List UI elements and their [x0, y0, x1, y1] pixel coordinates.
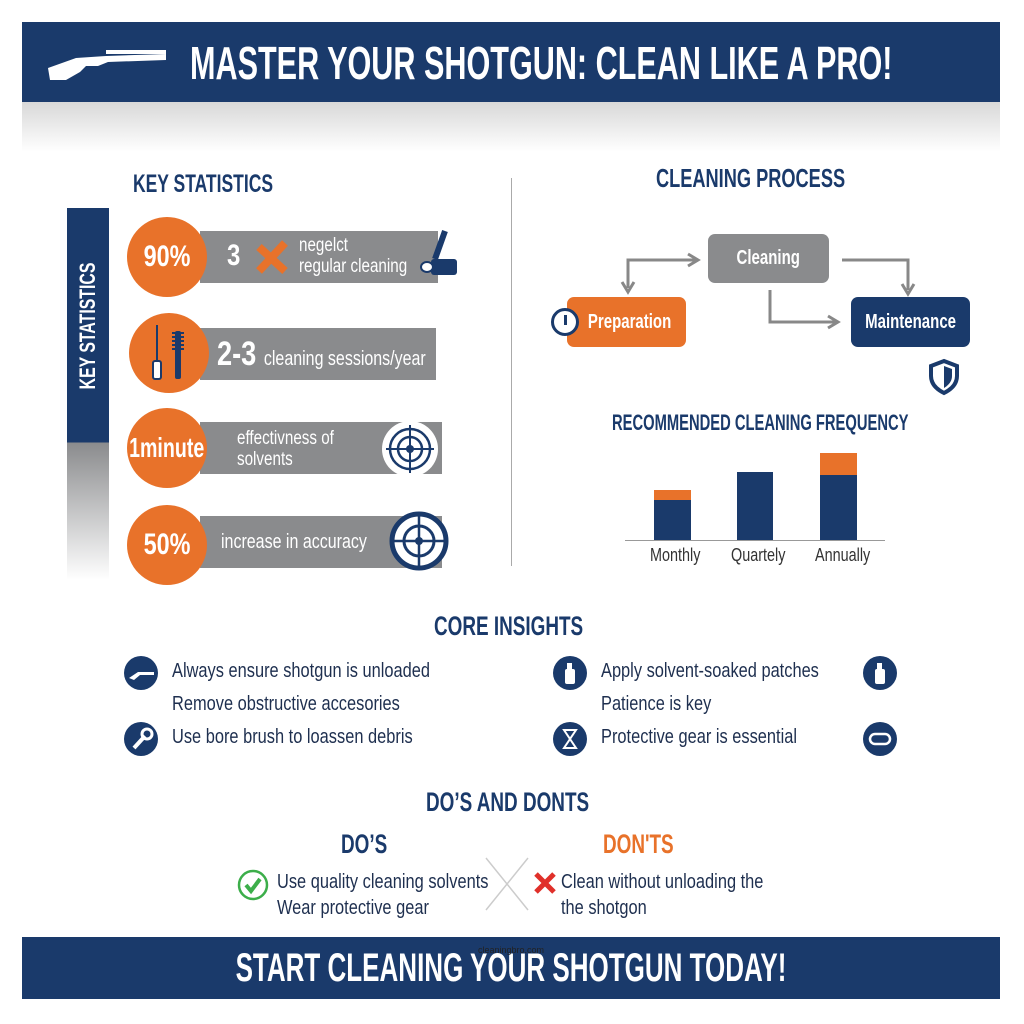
icon: clock [551, 308, 579, 336]
heading: cleaning process: CLEANING PROCESS [656, 163, 845, 193]
dos list: Wear protective gear [277, 897, 429, 919]
vertical label bar: KEY STATISTICS [75, 263, 100, 389]
insights list: Use bore brush to loassen debris [172, 726, 413, 748]
icon: gun [124, 656, 158, 690]
icon: target [390, 512, 448, 570]
stat row 1: negelct [299, 235, 348, 256]
insights list: Always ensure shotgun is unloaded [172, 660, 430, 682]
box: maintenance: Maintenance [865, 310, 956, 332]
icon: wrench [124, 722, 158, 756]
stat row 2 [129, 313, 436, 393]
heading: key statistics: KEY STATISTICS [133, 170, 273, 198]
insights list: Apply solvent-soaked patches [601, 660, 819, 682]
vertical label bar [67, 208, 109, 580]
bar chart [625, 453, 885, 565]
stat row 4: 50% [144, 528, 190, 561]
icon: crossed tools [256, 240, 288, 274]
footer band: START CLEANING YOUR SHOTGUN TODAY! [236, 946, 786, 990]
stat row 3: effectivness of [237, 428, 334, 449]
dos list [238, 870, 488, 919]
icon: bottle 2 [863, 656, 897, 690]
column heading: donts: DON'TS [603, 829, 674, 859]
box: preparation [567, 297, 686, 347]
flowchart [551, 234, 970, 396]
stat row 1: 90% [144, 240, 190, 273]
box: cleaning: Cleaning [737, 247, 800, 269]
stat row 1 [127, 217, 457, 297]
heading: core insights: CORE INSIGHTS [434, 611, 583, 641]
box: cleaning [708, 234, 829, 283]
donts list: Clean without unloading the [561, 871, 763, 893]
stat row 4 [127, 505, 448, 585]
icon: shield [929, 358, 959, 396]
stat row 1: 3 [227, 239, 240, 272]
column heading: dos: DO’S [341, 829, 387, 859]
stat row 3 [127, 408, 442, 488]
stat row 1: regular cleaning [299, 256, 407, 277]
box: maintenance [851, 297, 970, 347]
box: preparation: Preparation [588, 310, 671, 332]
icon: shotgun [48, 50, 166, 80]
stat row 4: increase in accuracy [221, 531, 367, 553]
footer band: cleaningbro.com [478, 945, 544, 955]
heading: recommended frequency: RECOMMENDED CLEANING FREQUENCY [612, 410, 908, 435]
title: MASTER YOUR SHOTGUN: CLEAN LIKE A PRO! [190, 37, 892, 89]
donts list [534, 871, 763, 919]
icon: target [382, 422, 438, 474]
bar chart: Quartely [731, 545, 785, 565]
icon: hourglass [553, 722, 587, 756]
donts list: the shotgon [561, 897, 647, 919]
bar chart: Monthly [650, 545, 700, 565]
insights list: Patience is key [601, 693, 711, 715]
icon: goggles [863, 722, 897, 756]
dos list: Use quality cleaning solvents [277, 871, 488, 893]
icon: bottle [553, 656, 587, 690]
icon: brush kit [420, 230, 457, 275]
insights list: Protective gear is essential [601, 726, 797, 748]
insights list: Remove obstructive accesories [172, 693, 400, 715]
header band [22, 22, 1000, 102]
heading: dos and donts: DO’S AND DONTS [426, 787, 589, 817]
footer band [22, 937, 1000, 999]
stat row 3: 1minute [129, 432, 205, 463]
bar chart: Annually [815, 545, 870, 565]
insights list [124, 656, 897, 756]
stat row 3: solvents [237, 449, 293, 470]
stat row 2: 2-3 cleaning sessions/year [217, 335, 426, 373]
